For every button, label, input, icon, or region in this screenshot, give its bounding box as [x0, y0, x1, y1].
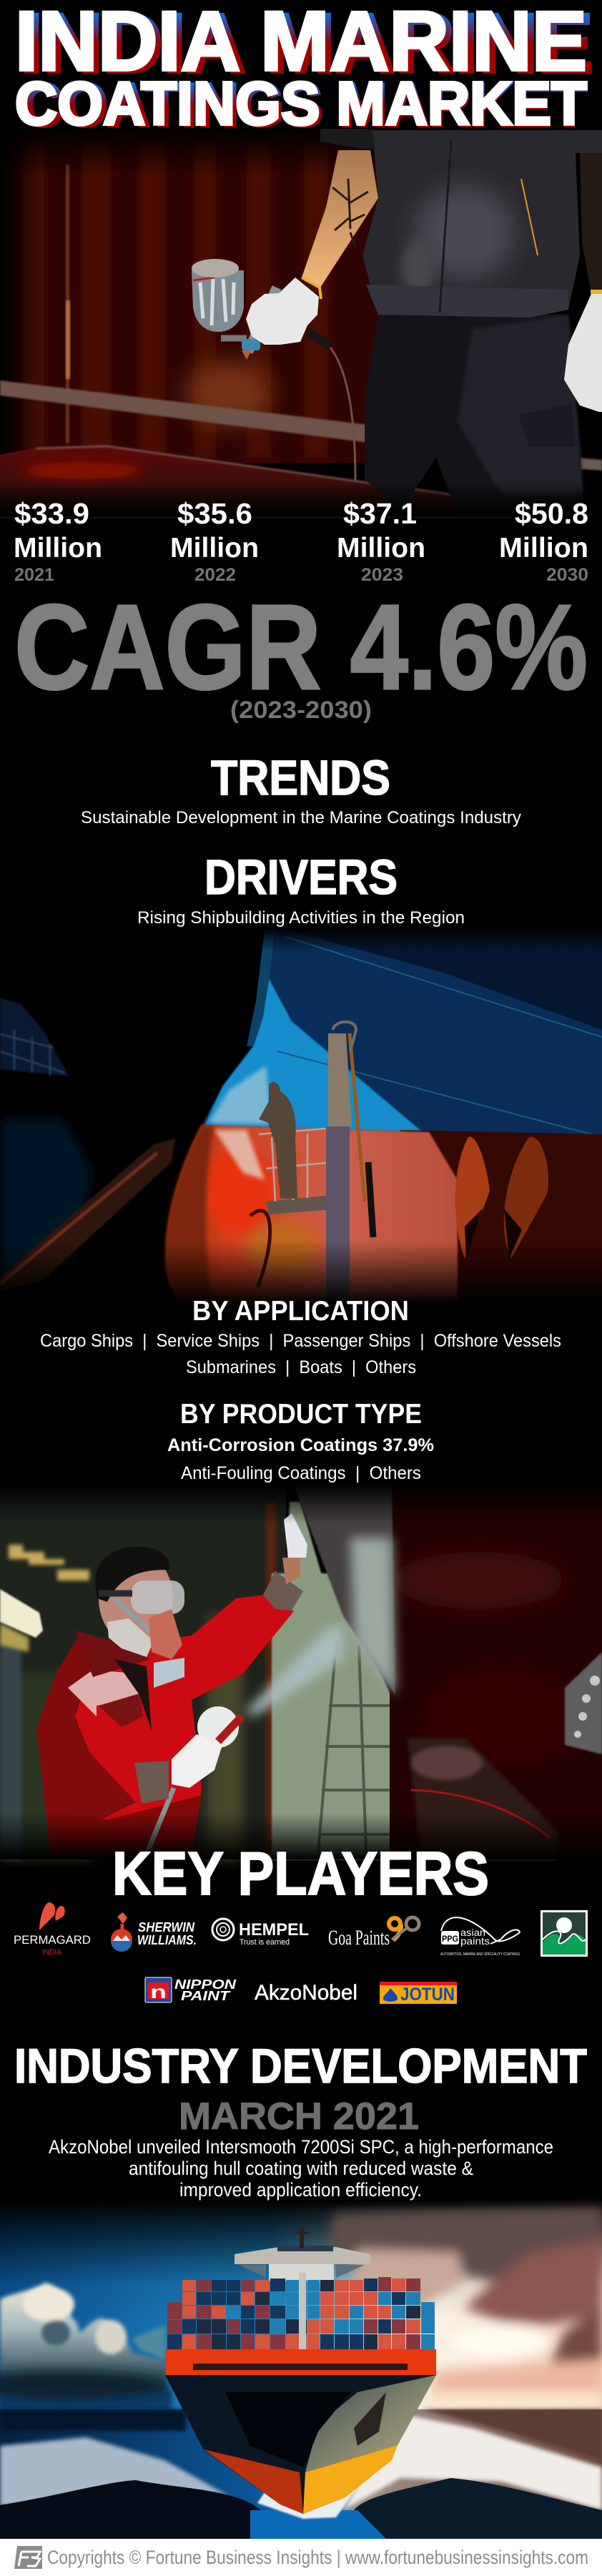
- dark dockside structures: [0, 998, 175, 1291]
- title line 2: COATINGS MARKET: [15, 70, 587, 138]
- market value 2021: [14, 497, 102, 585]
- by application heading: BY APPLICATION: [192, 1296, 409, 1327]
- container stacks: [167, 2273, 435, 2373]
- market value 2030: 2030: [546, 565, 588, 585]
- logo: green wave emblem: [541, 1910, 588, 1957]
- by product type heading: BY PRODUCT TYPE: [180, 1399, 422, 1430]
- development description: improved application efficiency.: [179, 2179, 422, 2201]
- logo: Nippon Paint: [145, 1977, 237, 2003]
- hull and mist: [293, 1484, 602, 1859]
- application list row 2: Submarines | Boats | Others: [186, 1357, 416, 1377]
- workshop background: [0, 1484, 400, 1859]
- market value 2022: [170, 497, 259, 585]
- logo: PPG Asian Paints: [440, 1917, 520, 1957]
- paint hose: [330, 348, 355, 481]
- leading product share: Anti-Corrosion Coatings 37.9%: [167, 1435, 434, 1455]
- head with goggles and respirator: [95, 1547, 184, 1659]
- market value 2023: [337, 497, 425, 585]
- market value 2021: 2021: [14, 565, 54, 585]
- hull openings: [455, 1137, 548, 1259]
- logo: AkzoNobel: AkzoNobel: [255, 1981, 357, 2005]
- logo: PPG Asian Paints: paints: [460, 1935, 490, 1947]
- ship hull: [165, 2349, 436, 2514]
- drivers heading: DRIVERS: [204, 850, 398, 905]
- other product types: Anti-Fouling Coatings | Others: [181, 1463, 421, 1483]
- market value 2023: 2023: [361, 565, 403, 585]
- application list row 1: Cargo Ships | Service Ships | Passenger Ships | Offshore Vessels: [40, 1331, 561, 1351]
- logo: Sherwin-Williams: WILLIAMS.: [137, 1933, 197, 1947]
- spray gun: [192, 259, 330, 360]
- market value 2023: $37.1: [343, 497, 417, 530]
- logo: Hempel: HEMPEL: [239, 1920, 309, 1940]
- photo: worker in red suit spraying hull: [0, 1459, 602, 1859]
- corrugated red wall: [0, 127, 379, 463]
- sea: [0, 2409, 602, 2539]
- market value 2021: Million: [14, 533, 102, 564]
- logo: PPG Asian Paints: asian: [460, 1927, 485, 1938]
- drivers text: Rising Shipbuilding Activities in the Region: [137, 908, 465, 928]
- white glove on gun: [246, 277, 319, 345]
- logo: PPG Asian Paints: AUTOMOTIVE, MARINE AND SPECIALITY COATINGS: [440, 1952, 520, 1957]
- red hood foreground: [0, 445, 515, 518]
- logo: Permagard India: [14, 1902, 91, 1957]
- tattooed left arm: [302, 150, 378, 299]
- logo: Sherwin-Williams: [111, 1912, 197, 1952]
- logo: Sherwin-Williams: SHERWIN: [138, 1920, 195, 1935]
- horizontal rail: [0, 380, 602, 471]
- title line 2 shadow: COATINGS MARKET: [21, 72, 587, 139]
- key players heading: KEY PLAYERS: [112, 1840, 489, 1908]
- market value 2023: Million: [337, 533, 425, 564]
- red hull: [166, 1125, 602, 1302]
- raised arm cuff and glove: [263, 1513, 307, 1611]
- title: [15, 0, 593, 139]
- photo: worker with spray gun: [0, 127, 602, 518]
- spray gun and lower glove: [134, 1706, 242, 1856]
- logo: PPG Asian Paints: PPG: [442, 1934, 458, 1944]
- logo: Goa Paints 90: Goa Paints: [328, 1926, 390, 1950]
- logo: Hempel: Trust is earned: [240, 1938, 290, 1947]
- market value 2022: Million: [170, 533, 259, 564]
- blue hull: [202, 930, 602, 1137]
- market value 2021: $33.9: [14, 497, 89, 530]
- development date: MARCH 2021: [179, 2095, 419, 2138]
- market value 2030: [499, 497, 588, 585]
- painter on lift: [259, 1082, 297, 1199]
- logo: Nippon Paint: PAINT: [181, 1989, 232, 2003]
- market value 2030: Million: [499, 533, 588, 564]
- boom lift: [259, 1022, 373, 1302]
- right arm and glove: [564, 153, 602, 412]
- photo: ship hull painting: [0, 927, 602, 1304]
- development description: AkzoNobel unveiled Intersmooth 7200Si SPC, a high-performance: [49, 2136, 553, 2158]
- trends text: Sustainable Development in the Marine Coatings Industry: [81, 808, 521, 827]
- footer bar: [0, 2539, 602, 2576]
- logo: Hempel: [212, 1919, 309, 1947]
- CAGR period: (2023-2030): [230, 697, 372, 724]
- trends heading: TRENDS: [211, 750, 390, 805]
- development description: antifouling hull coating with reduced waste &: [129, 2158, 473, 2179]
- market value 2030: $50.8: [515, 497, 588, 530]
- photo: container ship at sea: [0, 2188, 602, 2539]
- ship superstructure: [235, 2227, 370, 2281]
- logo: Permagard India: INDIA: [42, 1948, 62, 1957]
- spray cloud: [246, 1623, 343, 1716]
- red suit: [36, 1595, 294, 1852]
- sky: [0, 2199, 602, 2410]
- sleeve, vest and trousers: [320, 129, 602, 515]
- logo: Permagard India: PERMAGARD: [14, 1933, 91, 1947]
- development description: [49, 2136, 553, 2201]
- market value 2022: 2022: [194, 565, 236, 585]
- logo: Jotun: JOTUN: [400, 1985, 455, 2005]
- logo: Nippon Paint: n: [150, 1981, 167, 2002]
- clouds: [0, 2206, 602, 2410]
- footer logo: [14, 2546, 42, 2569]
- market value 2022: $35.6: [177, 497, 252, 530]
- logo: Jotun: [380, 1982, 457, 2005]
- logo: Nippon Paint: NIPPON: [174, 1977, 237, 1992]
